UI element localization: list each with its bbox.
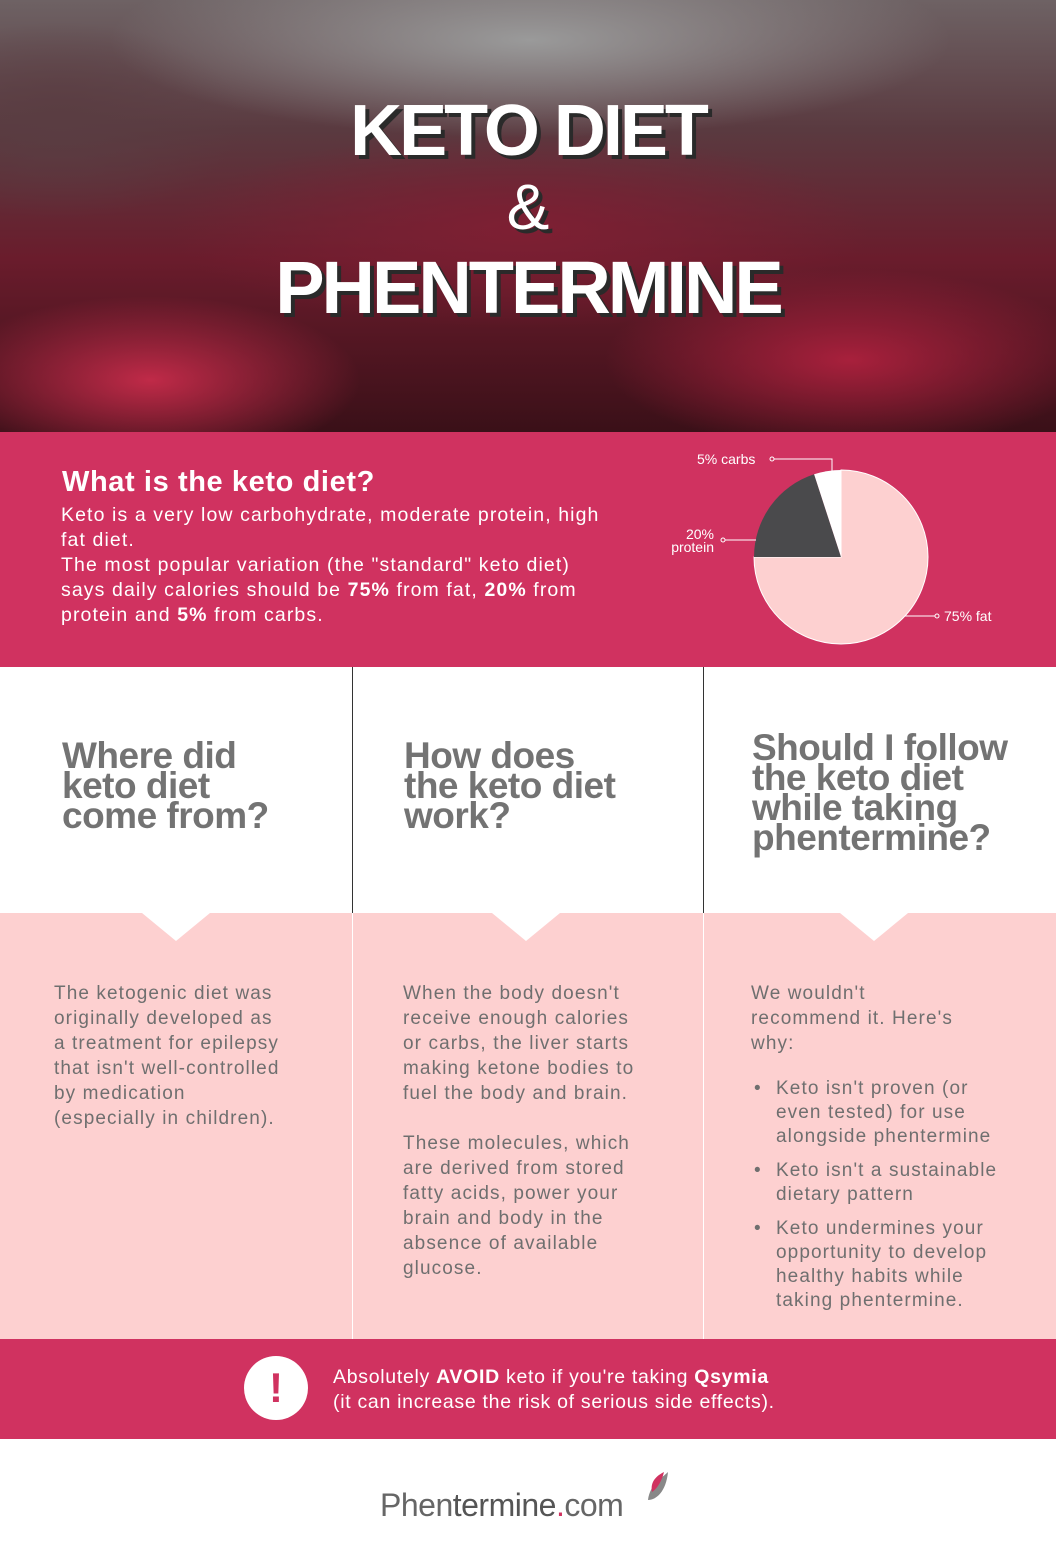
text: recommendation: even tested) for use	[776, 1102, 966, 1123]
icon: exclamation: !	[269, 1364, 283, 1411]
pie chart	[671, 451, 992, 644]
text block: The most popular variation (the "standard" keto diet)	[61, 554, 570, 576]
logo	[380, 1472, 668, 1523]
text block: Keto is a very low carbohydrate, moderate protein, high	[61, 504, 600, 526]
warning text: (it can increase the risk of serious side effects).	[333, 1391, 775, 1413]
column dividers	[352, 667, 353, 913]
text: how it works: brain and body in the	[403, 1208, 604, 1229]
hero banner	[0, 0, 1056, 432]
logo: Phentermine.com	[380, 1487, 623, 1523]
text: how it works: fuel the body and brain.	[403, 1083, 628, 1104]
panel: pink content area	[0, 913, 1056, 1339]
text: recommendation: •	[754, 1218, 762, 1239]
heading: What is the keto diet?	[62, 466, 375, 498]
title: phentermine: PHENTERMINE	[275, 246, 781, 329]
text: how it works: glucose.	[403, 1258, 483, 1279]
text block	[61, 504, 600, 626]
text: recommendation: dietary pattern	[776, 1184, 914, 1205]
text: origin: a treatment for epilepsy	[54, 1033, 279, 1054]
text block: fat diet.	[61, 529, 135, 551]
text: how it works: When the body doesn't	[403, 983, 620, 1004]
text: how it works: or carbs, the liver starts	[403, 1033, 629, 1054]
text: recommendation: Keto isn't a sustainable	[776, 1160, 997, 1181]
heading: should I follow: while taking	[752, 787, 958, 828]
pie chart: 5% carbs	[697, 451, 755, 467]
text block: says daily calories should be 75% from fat, 20% from	[61, 579, 577, 601]
icon: leaf	[648, 1472, 668, 1500]
title: keto diet: KETO DIET	[350, 91, 706, 171]
pie chart: 75% fat	[944, 608, 992, 624]
pie chart: protein	[671, 539, 714, 555]
heading: should I follow: phentermine?	[752, 817, 991, 858]
text: how it works: are derived from stored	[403, 1158, 625, 1179]
text: recommendation: opportunity to develop	[776, 1242, 987, 1263]
text: origin: that isn't well-controlled	[54, 1058, 279, 1079]
text: how it works: making ketone bodies to	[403, 1058, 634, 1079]
pie chart: 20%	[686, 526, 714, 542]
text: origin: by medication	[54, 1083, 186, 1104]
text: origin: originally developed as	[54, 1008, 273, 1029]
text: how it works: absence of available	[403, 1233, 598, 1254]
heading: where did keto come from: keto diet	[62, 765, 210, 806]
text block: protein and 5% from carbs.	[61, 604, 324, 626]
heading: where did keto come from	[62, 735, 269, 836]
heading: should I follow: Should I follow	[752, 727, 1008, 768]
text: recommendation: healthy habits while	[776, 1266, 964, 1287]
text: recommendation: taking phentermine.	[776, 1290, 964, 1311]
icon: exclamation	[244, 1356, 308, 1420]
text: how it works	[403, 983, 634, 1279]
text: origin: The ketogenic diet was	[54, 983, 273, 1004]
heading: should I follow	[752, 727, 1008, 858]
text: how it works: receive enough calories	[403, 1008, 629, 1029]
text: origin: (especially in children).	[54, 1108, 275, 1129]
warning text: Absolutely AVOID keto if you're taking Qsymia	[333, 1366, 769, 1388]
heading: how does keto work	[404, 735, 616, 836]
title: ampersand: &	[507, 171, 549, 243]
text: recommendation: why:	[751, 1033, 794, 1054]
text: how it works: These molecules, which	[403, 1133, 630, 1154]
panel: warning	[0, 1339, 1056, 1439]
heading: how does keto work: How does	[404, 735, 575, 776]
heading: how does keto work: the keto diet	[404, 765, 615, 806]
text: recommendation: We wouldn't	[751, 983, 866, 1004]
text: recommendation: Keto isn't proven (or	[776, 1078, 969, 1099]
heading: where did keto come from: come from?	[62, 795, 269, 836]
text: recommendation: Keto undermines your	[776, 1218, 984, 1239]
warning text	[333, 1366, 775, 1413]
heading: how does keto work: work?	[404, 795, 510, 836]
text: recommendation	[751, 983, 997, 1311]
text: recommendation: •	[754, 1160, 762, 1181]
text: origin	[54, 983, 279, 1129]
text: recommendation: •	[754, 1078, 762, 1099]
text: how it works: fatty acids, power your	[403, 1183, 618, 1204]
text: recommendation: recommend it. Here's	[751, 1008, 953, 1029]
text: recommendation: alongside phentermine	[776, 1126, 991, 1147]
heading: should I follow: the keto diet	[752, 757, 963, 798]
heading: where did keto come from: Where did	[62, 735, 236, 776]
panel: what is keto	[0, 432, 1056, 667]
